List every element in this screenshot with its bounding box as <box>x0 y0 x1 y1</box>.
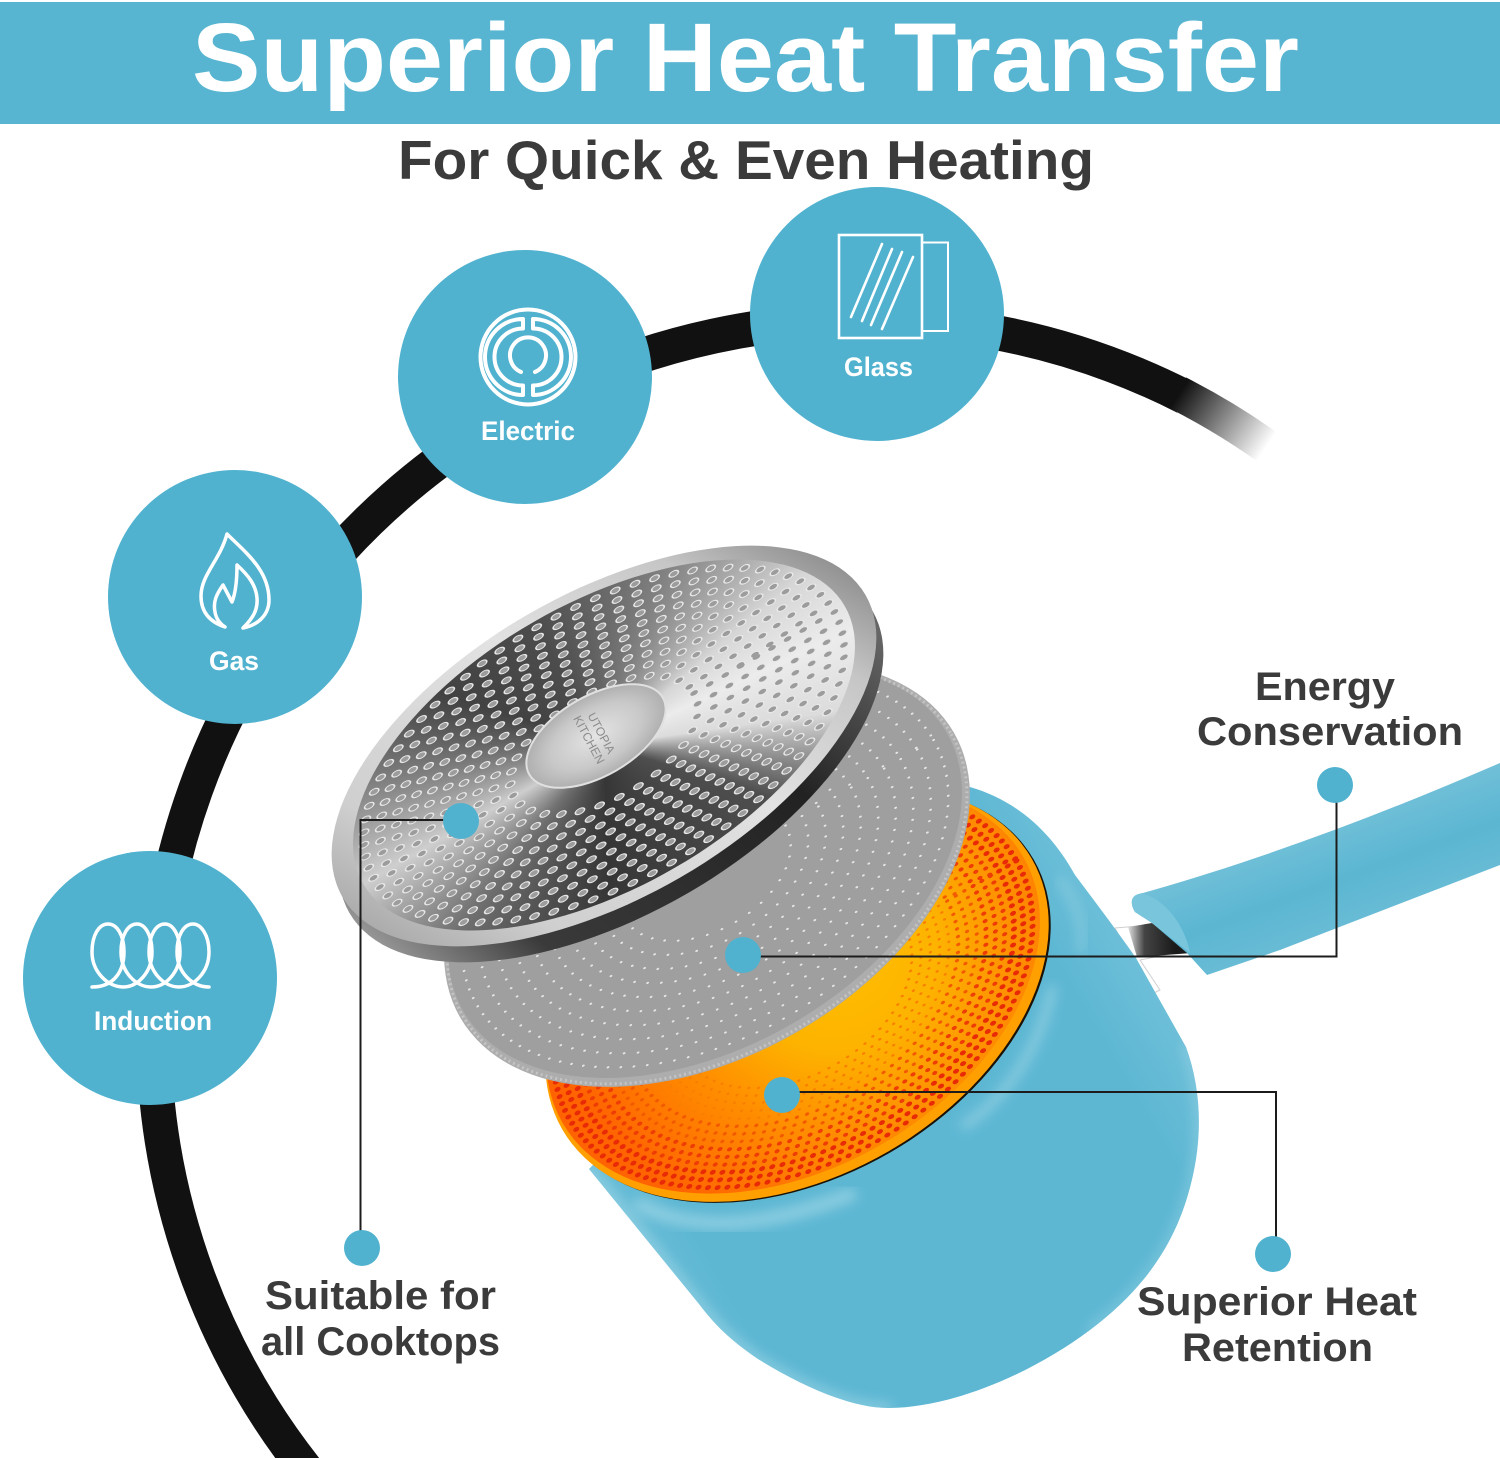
pan body <box>589 787 1199 1408</box>
disc edge texture <box>374 580 1040 1170</box>
icon: induction coil <box>92 924 209 987</box>
steel dimple highlights <box>306 495 902 995</box>
label: Superior Heat <box>1137 1280 1417 1324</box>
label: Suitable for <box>265 1274 496 1318</box>
gray disc dots <box>393 596 1017 1148</box>
subtitle: For Quick & Even Heating <box>398 129 1094 191</box>
leader line <box>760 790 1336 956</box>
stainless steel base <box>266 463 949 1045</box>
marker on base <box>443 803 479 839</box>
label: Energy <box>1255 665 1396 709</box>
header band <box>0 2 1500 124</box>
marker by label <box>344 1230 380 1266</box>
hub engraving: KITCHEN <box>570 713 607 766</box>
connector bracket <box>1115 925 1190 995</box>
orange heat layer <box>471 701 1125 1288</box>
label: induction: Induction <box>94 1006 212 1036</box>
callout: energy conservation <box>725 665 1463 973</box>
base rim <box>266 463 942 1029</box>
steel dimple centres <box>306 495 902 995</box>
icon: glass cooktop <box>839 235 948 338</box>
heat dots <box>483 711 1103 1269</box>
pan handle <box>1115 763 1500 995</box>
label: gas: Gas <box>209 646 259 676</box>
icon: electric coil <box>480 310 576 404</box>
icon: flame <box>201 534 269 628</box>
base wall <box>273 479 949 1045</box>
label: Retention <box>1182 1326 1373 1370</box>
title: Superior Heat Transfer <box>192 3 1299 112</box>
label: all Cooktops <box>261 1320 500 1364</box>
gray middle layer <box>370 576 1044 1174</box>
handle end cap <box>1132 894 1190 953</box>
label: Conservation <box>1197 710 1463 754</box>
marker by label <box>1255 1236 1291 1272</box>
body highlights <box>589 880 1199 1408</box>
marker by label <box>1317 767 1353 803</box>
leader line <box>360 820 445 1235</box>
label: electric: Electric <box>481 416 575 446</box>
handle connector <box>1128 923 1192 957</box>
cooktop badge: electric <box>398 250 652 504</box>
callout: superior heat retention <box>764 1077 1417 1370</box>
cooktop badge: gas <box>108 470 362 724</box>
leader line <box>798 1092 1276 1240</box>
centre hub <box>509 663 683 809</box>
cooktop badge: glass <box>750 187 1004 441</box>
hub engraving <box>570 707 620 766</box>
callout: suitable for all cooktops <box>261 803 500 1364</box>
label: glass: Glass <box>844 352 913 382</box>
cooktop badge: induction <box>23 851 277 1105</box>
brushed steel surface <box>292 483 916 1007</box>
cooktop arc <box>154 320 1285 1458</box>
marker on heat layer <box>764 1077 800 1113</box>
hub engraving: UTOPIA <box>585 710 618 756</box>
marker on gray layer <box>725 937 761 973</box>
handle grip <box>1132 763 1500 975</box>
